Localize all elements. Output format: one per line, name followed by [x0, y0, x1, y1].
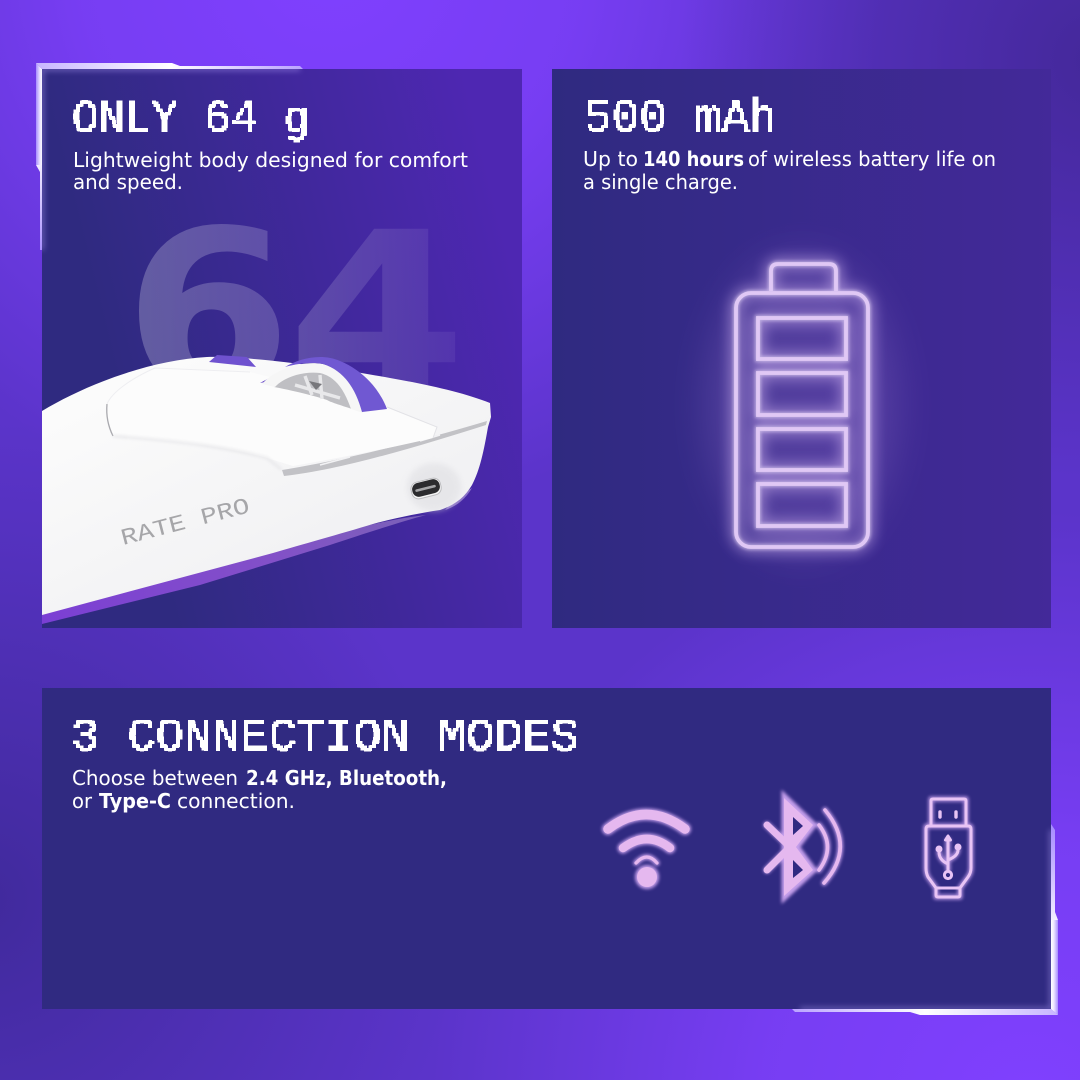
text: battery description: Up to — [583, 147, 638, 171]
text: weight description: Lightweight body designed for comfort — [73, 148, 468, 172]
mouse illustration — [42, 355, 491, 624]
icon: bluetooth — [767, 798, 840, 896]
big number 64: 6 — [124, 182, 292, 443]
heading: only 64 g: ONLY 64 g — [72, 94, 310, 146]
text: connection description: Type-C — [99, 789, 171, 813]
mouse top shell — [384, 429, 436, 449]
text: weight description — [73, 148, 468, 194]
mouse purple base — [42, 515, 426, 624]
text: connection description: connection. — [177, 789, 295, 813]
corner glow: top left — [36, 63, 303, 250]
panel: weight — [42, 69, 522, 628]
text: battery description: 140 hours — [643, 147, 744, 171]
heading: 3 connection modes: 3 CONNECTION MODES — [71, 712, 579, 764]
scroll wheel — [262, 357, 387, 413]
corner glow: bottom right — [792, 824, 1058, 1015]
panel: battery — [552, 69, 1051, 628]
text: weight description: and speed. — [73, 170, 183, 194]
icon: battery — [707, 255, 897, 555]
big number 64 — [139, 224, 455, 386]
text: connection description: or — [72, 789, 93, 813]
mouse seam — [282, 421, 487, 476]
heading: 500 mAh: 500 mAh — [584, 93, 777, 145]
side button — [209, 355, 256, 367]
mouse body — [42, 357, 491, 615]
text: connection description: Choose between — [72, 766, 238, 790]
text: battery description — [583, 147, 996, 194]
text: connection description: 2.4 GHz, Bluetooth, — [246, 766, 447, 790]
panel: connection modes — [42, 688, 1051, 1009]
icon: usb — [926, 799, 971, 897]
text: connection description — [72, 766, 447, 813]
text: battery description: a single charge. — [583, 170, 738, 194]
icon: wifi — [608, 814, 685, 889]
big number 64: 4 — [287, 184, 467, 445]
mouse logo: RATE PRO — [118, 494, 253, 552]
USB-C port — [407, 463, 461, 511]
text: battery description: of wireless battery life on — [748, 147, 996, 171]
